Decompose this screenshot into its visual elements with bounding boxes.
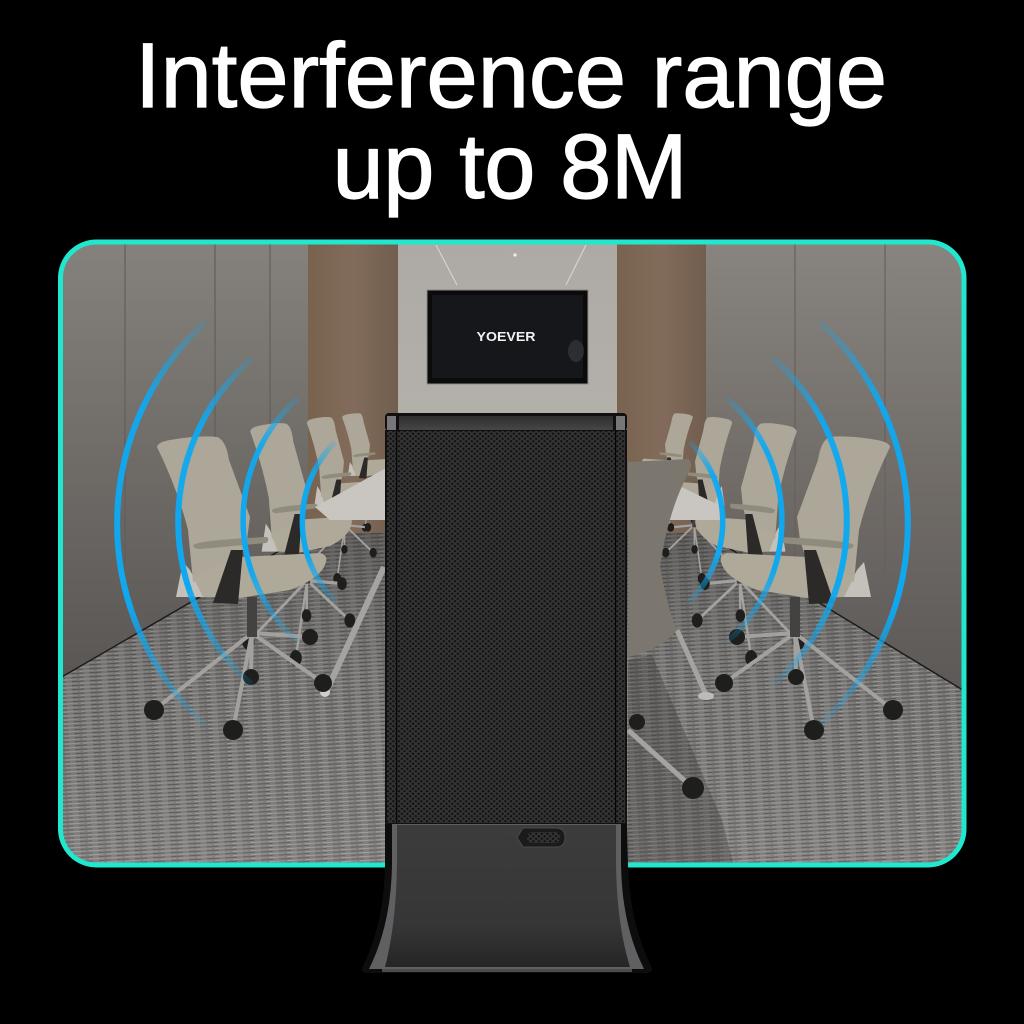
device mesh body — [385, 430, 627, 824]
right wall — [704, 242, 966, 712]
near chair right — [715, 436, 903, 740]
title: up to 8M — [332, 116, 688, 218]
middle chair left — [242, 423, 355, 666]
device base — [362, 823, 652, 973]
wood panel right — [617, 242, 706, 542]
wall floor edges — [63, 548, 962, 690]
wall display — [427, 290, 588, 384]
display logo: YOEVER — [476, 330, 536, 344]
conference table right — [670, 487, 720, 520]
left wall — [60, 242, 310, 702]
signal arcs right — [688, 322, 908, 725]
carpet floor — [60, 533, 966, 870]
back wall — [398, 244, 617, 413]
device top cap — [385, 413, 627, 431]
far chairs left — [306, 413, 385, 582]
title: Interference range — [135, 25, 887, 127]
title — [135, 25, 887, 218]
signal arcs left — [117, 322, 337, 725]
panel: meeting room photo — [60, 242, 966, 870]
teal frame — [60, 242, 964, 865]
device: speaker unit — [362, 413, 652, 973]
conference table left — [315, 468, 386, 697]
far chairs right — [640, 413, 737, 584]
front chair beside device — [628, 459, 714, 799]
device port — [517, 828, 565, 847]
near chair left — [144, 436, 332, 740]
middle chair right — [692, 423, 805, 666]
wood panel left — [308, 242, 398, 542]
